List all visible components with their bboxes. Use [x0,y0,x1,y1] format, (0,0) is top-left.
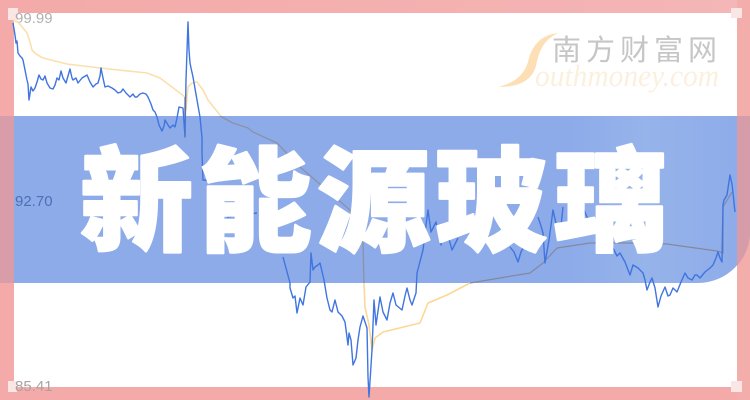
average segment lower [364,283,470,350]
axis label middle: 92.70 [15,193,53,210]
watermark domain: outhmoney.com [535,58,719,93]
watermark logo [498,27,722,93]
blue banner [0,116,750,283]
axis label top: 99.99 [15,10,53,27]
watermark chinese name: 南方财富网 [552,27,722,69]
average segment upper [13,20,220,115]
average segment right [470,192,732,283]
banner over right frame [737,116,750,266]
logo swoosh [498,33,558,87]
average segment through banner [220,116,364,283]
title: 新能源玻璃 [80,111,672,275]
banner over left frame [0,116,14,283]
moving average line [13,20,732,350]
orange spike [184,97,186,137]
axis label bottom: 85.41 [15,378,53,395]
